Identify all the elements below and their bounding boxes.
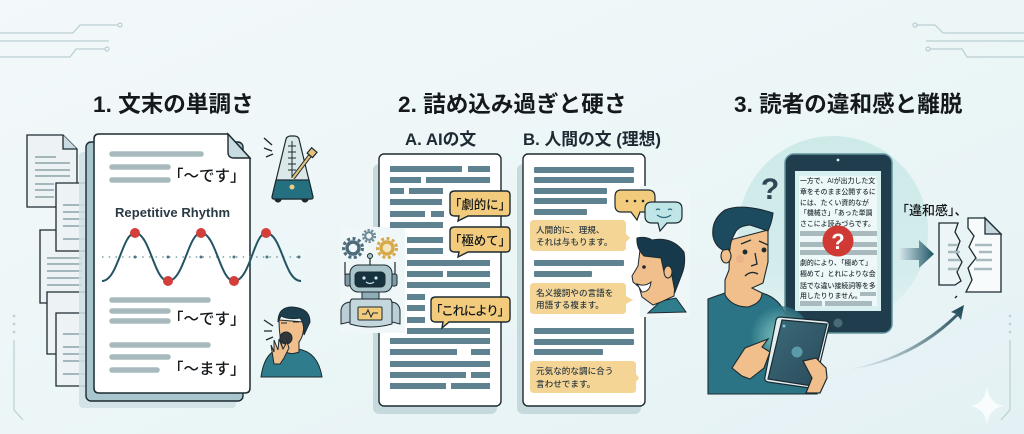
heading: A: A. AIの文 bbox=[405, 130, 476, 149]
icon: yawning person bbox=[261, 307, 322, 377]
icon: red question bbox=[822, 226, 854, 256]
label: 違和感: 「違和感」、 bbox=[896, 203, 968, 218]
icon: handheld tablet bbox=[765, 317, 829, 393]
icon: torn document bbox=[939, 218, 1001, 298]
text: tablet copy: 「機械さ」「あった単調 bbox=[800, 208, 872, 217]
callout: 劇的に: 「劇的に」 bbox=[449, 197, 511, 212]
label: ending 2: 「～です」 bbox=[168, 310, 246, 328]
text: tablet copy: 極めて」とれによりな会 bbox=[800, 269, 876, 278]
callout: human 3 bbox=[530, 361, 639, 393]
heading: 2: 2. 詰め込み過ぎと硬さ bbox=[398, 91, 626, 117]
icon: red question: ? bbox=[831, 229, 845, 254]
text: tablet copy: さこによ読みづらです。 bbox=[800, 219, 875, 228]
panel: A AI text bbox=[340, 154, 511, 414]
icon: question mark: ? bbox=[761, 173, 779, 206]
heading: 3: 3. 読者の違和感と離脱 bbox=[734, 92, 963, 117]
callout: これにより: 「これにより」 bbox=[430, 304, 510, 318]
arrow: rising curve bbox=[846, 305, 964, 370]
callout: 極めて: 「極めて」 bbox=[449, 233, 511, 248]
text: tablet copy bbox=[800, 176, 876, 300]
callout: 極めて bbox=[449, 227, 511, 257]
icon: smiling man bbox=[632, 237, 686, 313]
heading: B: B. 人間の文 (理想) bbox=[523, 130, 661, 149]
icon: chat bubbles bbox=[615, 190, 682, 231]
chart: rhythm wave bbox=[102, 228, 301, 286]
panel: stacked background documents bbox=[27, 135, 95, 386]
icon: robot with gears bbox=[341, 230, 400, 327]
panel: reader glow circle bbox=[738, 136, 928, 326]
callout: human 3: 元気な的な調に合う bbox=[536, 365, 613, 376]
text: tablet copy: 一方で、AIが出力した文 bbox=[800, 176, 875, 185]
panel: B human text bbox=[517, 154, 690, 414]
text: tablet copy: 劇的により、「極めて」 bbox=[800, 258, 872, 267]
text: tablet copy: 話でな違い接続詞等を多 bbox=[800, 281, 876, 290]
callout: 劇的に bbox=[449, 191, 511, 221]
callout: human 3: 言わせでます。 bbox=[536, 379, 595, 389]
label: ending 3: 「～ます」 bbox=[168, 360, 246, 378]
callout: human 2 bbox=[530, 283, 633, 314]
panel: main document bbox=[79, 134, 301, 408]
arrow: gradient right bbox=[898, 240, 934, 268]
label: rhythm: Repetitive Rhythm bbox=[115, 205, 230, 220]
icon: sparkle bbox=[970, 386, 1004, 425]
callout: human 1: 人間的に、理規、 bbox=[536, 224, 604, 235]
callout: human 1: それは与もります。 bbox=[536, 236, 612, 247]
callout: human 1 bbox=[530, 220, 630, 251]
callout: これにより bbox=[430, 297, 510, 328]
panel: large tablet bbox=[785, 154, 892, 333]
text: tablet copy: には、たくい資的なが bbox=[800, 198, 869, 207]
icon: metronome bbox=[264, 136, 317, 202]
callout: human 2: 用語する複ます。 bbox=[536, 299, 604, 310]
heading: 1: 1. 文末の単調さ bbox=[93, 92, 254, 117]
icon: worried reader bbox=[708, 207, 817, 394]
callout: human 2: 名义接詞やの言語を bbox=[536, 287, 613, 298]
label: ending 1: 「～です」 bbox=[168, 167, 246, 185]
text: tablet copy: 章をそのまま公開するに bbox=[800, 187, 876, 196]
text: tablet copy: 用したりりません。 bbox=[800, 292, 862, 300]
